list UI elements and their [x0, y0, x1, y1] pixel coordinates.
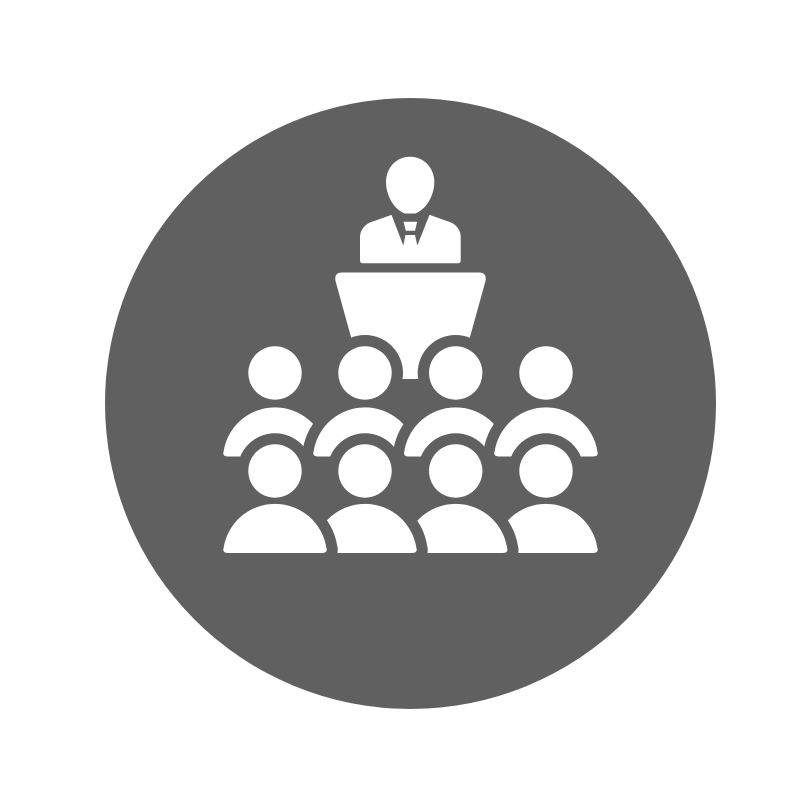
- back row head 1: [248, 346, 302, 400]
- speaker head: [386, 157, 434, 214]
- icon: front row head rings cutting the back row bodies: [237, 433, 584, 509]
- speaker collar gap: [391, 214, 430, 246]
- icon: front row bodies: [223, 504, 598, 553]
- front ring 4: [508, 433, 584, 509]
- podium ring left: [327, 335, 403, 411]
- front row body 4: [494, 504, 598, 553]
- back row body 3: [404, 407, 507, 456]
- back row head 4: [519, 346, 573, 400]
- back row head 3: [429, 346, 482, 400]
- background circle: [105, 98, 716, 709]
- front row head 1: [248, 444, 302, 498]
- speaker tie knot: [404, 222, 417, 231]
- icon: back row head rings cutting the podium: [327, 335, 494, 411]
- back row head 2: [338, 346, 392, 400]
- icon: back row audience bodies: [223, 407, 598, 456]
- icon: back row heads: [248, 346, 573, 400]
- icon: front row heads: [248, 444, 573, 498]
- icon: podium: [335, 272, 486, 379]
- front row head 4: [519, 444, 573, 498]
- front ring 3: [418, 433, 493, 509]
- back row body 1: [223, 407, 327, 456]
- podium ring right: [418, 335, 494, 411]
- icon: speaker: [360, 157, 461, 263]
- front row head 3: [429, 444, 482, 498]
- front row head 2: [338, 444, 392, 498]
- front row body 3: [404, 504, 507, 553]
- back row body 4: [494, 407, 598, 456]
- back row body 2: [313, 407, 417, 456]
- front ring 1: [237, 433, 313, 509]
- front ring 2: [327, 433, 403, 509]
- front row body 1: [223, 504, 327, 553]
- front row body 2: [313, 504, 417, 553]
- speaker suit: [360, 215, 461, 263]
